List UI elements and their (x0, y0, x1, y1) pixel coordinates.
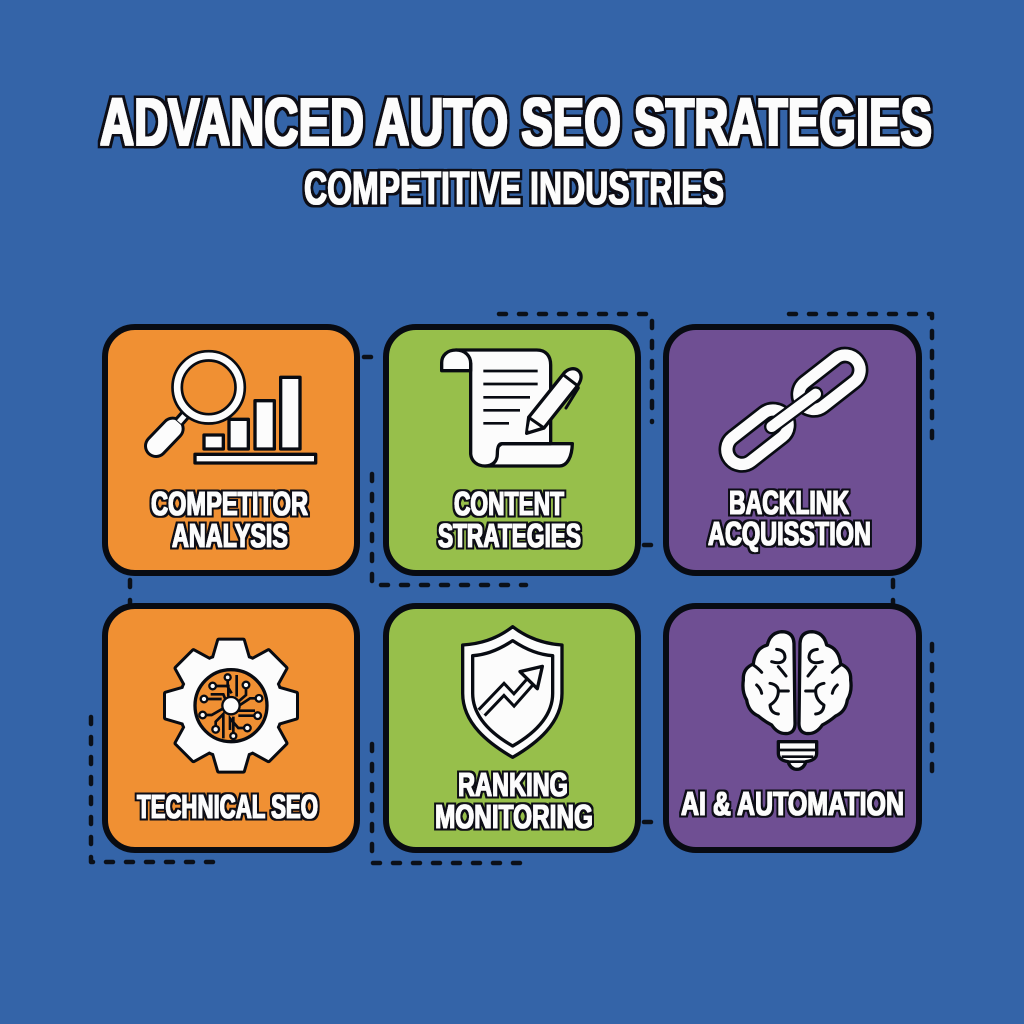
panel: ai and automation (666, 606, 919, 850)
label: backlink acquisition: BACKLINK (729, 484, 849, 521)
label: backlink acquisition (708, 484, 871, 552)
subtitle: COMPETITIVE INDUSTRIES (304, 162, 724, 214)
label: backlink acquisition: ACQUISSTION (708, 515, 871, 552)
label: content strategies: CONTENT (454, 485, 564, 522)
dashed connectors (91, 314, 932, 863)
label: competitor analysis: ANALYSIS (172, 517, 288, 554)
panel: ranking monitoring (386, 606, 638, 850)
label: ai and automation: AI & AUTOMATION (681, 785, 904, 822)
icon: gear with circuit (166, 641, 296, 771)
icon: magnifier and bar chart (156, 356, 316, 463)
panel: technical seo (105, 606, 357, 850)
label: ranking monitoring: RANKING (458, 766, 568, 803)
label: competitor analysis (151, 485, 308, 554)
icon: chain links (721, 349, 866, 470)
panel: competitor analysis (105, 327, 357, 573)
label: ranking monitoring (435, 766, 593, 835)
panel: content strategies (386, 327, 638, 573)
label: technical seo: TECHNICAL SEO (137, 788, 318, 825)
panel: backlink acquisition (666, 327, 919, 573)
icon: shield with rising arrow (463, 627, 562, 757)
icon: brain light bulb (743, 632, 851, 769)
label: ranking monitoring: MONITORING (435, 798, 593, 835)
label: competitor analysis: COMPETITOR (151, 485, 308, 522)
icon: scroll and pen (442, 350, 581, 466)
label: content strategies: STRATEGIES (438, 517, 581, 554)
label: content strategies (438, 485, 581, 554)
